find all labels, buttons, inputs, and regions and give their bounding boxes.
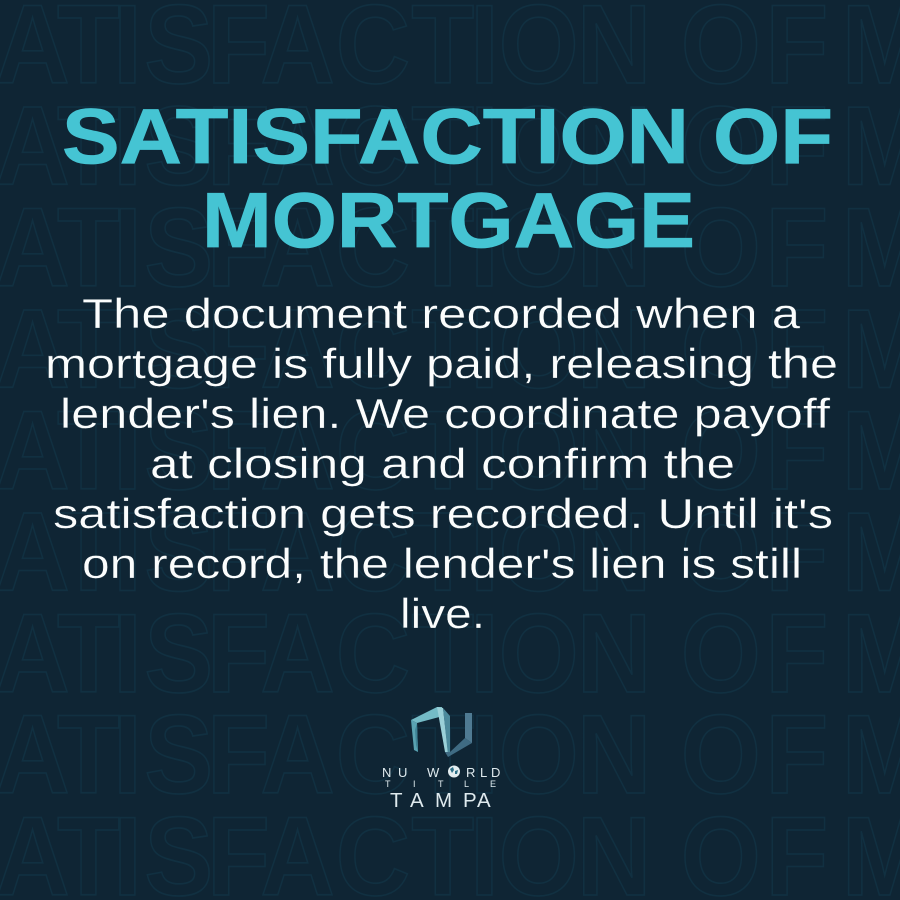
body text: on record, the lender's lien is still <box>82 540 802 587</box>
logo: Nu World Title Tampa <box>382 707 500 812</box>
title <box>62 92 833 264</box>
icon: NU building mark <box>411 707 472 757</box>
wordmark: TAMPA: TAMPA <box>390 789 491 812</box>
body text: The document recorded when a <box>82 290 801 337</box>
wordmark: NU WORLD <box>382 765 500 780</box>
body text: at closing and confirm the <box>150 440 735 487</box>
body text: satisfaction gets recorded. Until it's <box>53 490 833 537</box>
body text <box>45 290 838 637</box>
title: MORTGAGE <box>202 176 695 264</box>
title: SATISFACTION OF <box>62 92 833 180</box>
body text: live. <box>400 590 485 637</box>
wordmark: NU WORLD: RLD <box>466 765 500 780</box>
body text: mortgage is fully paid, releasing the <box>45 340 838 387</box>
wordmark: NU WORLD: W <box>427 765 440 780</box>
wordmark: NU WORLD: NU <box>382 765 407 780</box>
body text: lender's lien. We coordinate payoff <box>60 390 830 437</box>
icon: globe <box>448 766 460 778</box>
wordmark: TITLE: TITLE <box>385 779 496 789</box>
